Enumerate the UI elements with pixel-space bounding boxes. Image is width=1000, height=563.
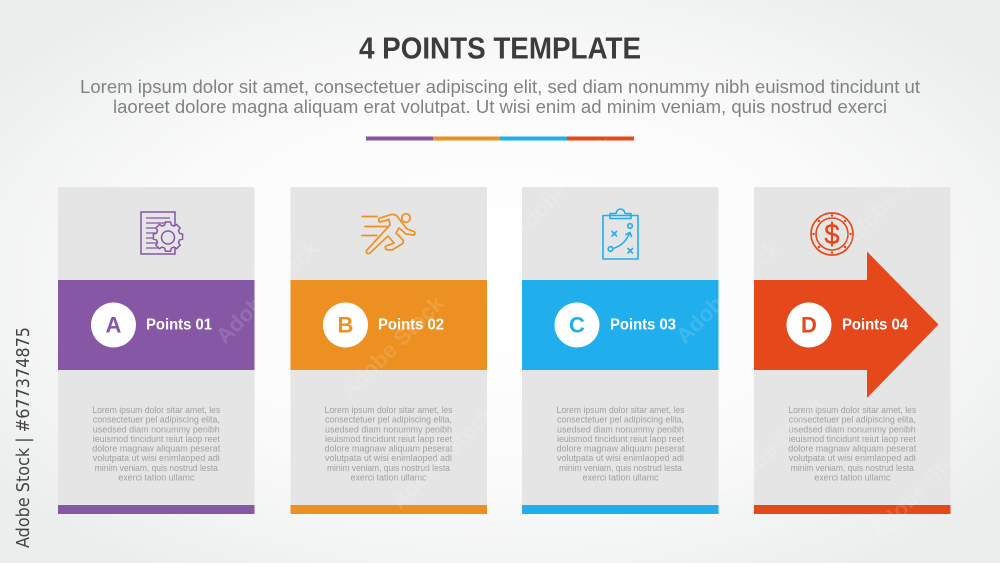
body text C	[556, 405, 685, 482]
watermark overlay: Adobe Stock	[336, 290, 449, 404]
body text B: ieuismod tincidunt reiut laop reet	[325, 434, 453, 444]
body text D: ieuismod tincidunt reiut laop reet	[789, 434, 916, 444]
body text B: dolore magnaw aliquam peserat	[324, 444, 453, 454]
watermark overlay: Adobe Stock	[716, 390, 829, 504]
stock id vertical label: Adobe Stock | #677374875	[13, 327, 34, 548]
label: Points 01: Points 01	[146, 316, 212, 334]
band: point C	[522, 280, 718, 370]
body text C: minim veniam, quis nostrud lesta	[559, 463, 682, 473]
watermark overlay: Adobe Stock	[386, 400, 499, 514]
body text A	[92, 405, 221, 482]
badge: A	[91, 302, 136, 348]
watermark overlay: Adobe Stock	[866, 430, 979, 544]
body text D	[788, 405, 917, 482]
arrow band: point D	[754, 252, 938, 398]
panel: point A	[58, 187, 254, 514]
watermark overlay: Adobe Stock	[506, 130, 619, 244]
body text C: Lorem ipsum dolor sitar amet, les	[556, 405, 685, 415]
panel: point B	[290, 187, 487, 514]
icon: strategy clipboard	[603, 209, 638, 259]
watermark overlay: Adobe Stock	[671, 235, 784, 349]
body text C: usedsed diam nonummy penibh	[557, 424, 684, 434]
badge: C	[554, 302, 600, 348]
body text C: dolore magnaw aliquam peserat	[556, 444, 685, 454]
panel: point C	[522, 187, 718, 514]
subtitle text: laoreet dolore magna aliquam erat volutpat. Ut wisi enim ad minim veniam, quis nostrud exerci	[113, 96, 887, 117]
body text C: consectetuer pel adipiscing elita,	[557, 415, 684, 425]
icon: running man	[362, 214, 415, 254]
label: Points 02: Points 02	[378, 316, 444, 334]
footer bar D	[754, 505, 950, 514]
body text A: Lorem ipsum dolor sitar amet, les	[92, 405, 221, 415]
body text A: dolore magnaw aliquam peserat	[92, 444, 221, 454]
badge: D: D	[801, 312, 817, 338]
watermark overlay: Adobe Stock	[211, 235, 324, 349]
body text D: dolore magnaw aliquam peserat	[788, 444, 917, 454]
panel: point D	[754, 187, 950, 514]
footer bar B	[290, 505, 487, 514]
body text D: exerci tation ullamc	[814, 472, 891, 482]
colour divider	[366, 136, 634, 140]
footer bar C	[522, 505, 718, 514]
band: point A	[58, 280, 254, 370]
body text B: volutpata ut wisi enimlaoped adi	[325, 453, 452, 463]
body text D: consectetuer pel adipiscing elita,	[789, 415, 916, 425]
subtitle text	[80, 76, 920, 117]
body text B	[324, 405, 453, 482]
title: 4 POINTS TEMPLATE	[359, 30, 641, 66]
body text B: Lorem ipsum dolor sitar amet, les	[324, 405, 453, 415]
badge: D	[786, 302, 832, 348]
body text D: minim veniam, quis nostrud lesta	[791, 463, 914, 473]
badge: C: C	[569, 312, 585, 338]
body text B: usedsed diam nonummy penibh	[325, 424, 452, 434]
body text A: usedsed diam nonummy penibh	[93, 424, 220, 434]
watermark overlay: Adobe Stock	[46, 50, 159, 164]
body text B: minim veniam, quis nostrud lesta	[327, 463, 450, 473]
footer bar A	[58, 505, 254, 514]
body text C: exerci tation ullamc	[582, 472, 659, 482]
body text A: volutpata ut wisi enimlaoped adi	[93, 453, 220, 463]
body text C: volutpata ut wisi enimlaoped adi	[557, 453, 684, 463]
subtitle text: Lorem ipsum dolor sit amet, consectetuer adipiscing elit, sed diam nonummy nibh euismod tincidunt ut	[80, 76, 920, 97]
band: point B	[290, 280, 487, 370]
label: Points 04: Points 04	[842, 316, 908, 334]
badge: B	[323, 302, 368, 348]
body text D: volutpata ut wisi enimlaoped adi	[789, 453, 916, 463]
badge: A: A	[106, 312, 122, 338]
watermark overlay: Adobe Stock	[836, 140, 949, 254]
body text D: Lorem ipsum dolor sitar amet, les	[788, 405, 917, 415]
body text A: exerci tation ullamc	[118, 472, 195, 482]
icon: dollar coin	[811, 213, 853, 255]
body text B: exerci tation ullamc	[350, 472, 427, 482]
body text D: usedsed diam nonummy penibh	[789, 424, 916, 434]
icon: document with gear	[141, 212, 183, 254]
badge: B: B	[338, 312, 353, 338]
body text A: ieuismod tincidunt reiut laop reet	[93, 434, 220, 444]
body text A: consectetuer pel adipiscing elita,	[93, 415, 220, 425]
body text C: ieuismod tincidunt reiut laop reet	[557, 434, 685, 444]
body text B: consectetuer pel adipiscing elita,	[325, 415, 452, 425]
body text A: minim veniam, quis nostrud lesta	[95, 463, 218, 473]
label: Points 03: Points 03	[610, 316, 676, 334]
